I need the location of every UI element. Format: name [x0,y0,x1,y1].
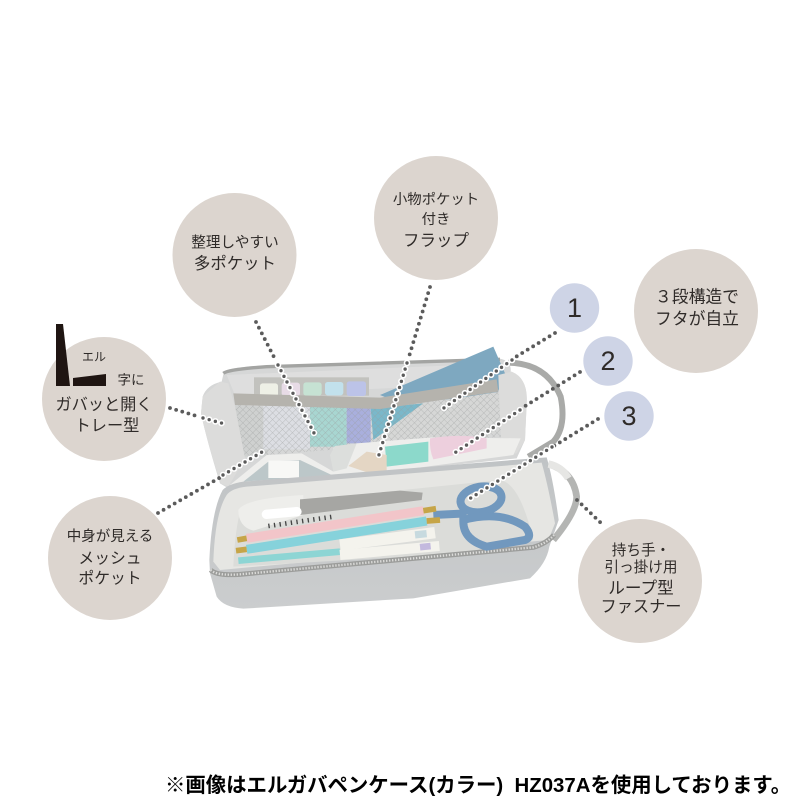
zipper teeth [211,535,554,575]
footnote: ※画像はエルガバペンケース(カラー) HZ037Aを使用しております。 [165,774,791,797]
callout circle: see-through mesh pocket [48,496,172,620]
colours behind the mesh [235,392,500,457]
callout circle: flap with small pocket: 付き [422,211,450,228]
number badge 2 [583,336,633,386]
callout circle: see-through mesh pocket: メッシュ [78,550,142,568]
flap inner shadow [243,460,332,482]
callout dots: mesh pocket [158,452,262,513]
callout circle: three tiers: フタが自立 [655,310,739,328]
tray interior [213,463,555,570]
callout circle: see-through mesh pocket: 中身が見える [67,528,153,545]
tray shell [209,457,559,609]
number badge 2: 2 [600,346,616,376]
callout circle: flap with small pocket: フラップ [403,231,470,250]
lid zipper [223,359,500,373]
callout circle: easy to organise pockets: 整理しやすい [191,234,279,251]
mesh pocket [235,392,502,457]
tray floor [233,480,533,567]
highlighter one [340,530,435,545]
number badge 1: 1 [567,293,582,323]
scissors [433,483,529,547]
highlighter two [238,543,439,561]
L shape caption: エル [82,350,106,364]
callout circle: easy to organise pockets: 多ポケット [194,255,276,273]
side gusset right [498,372,527,455]
shape suffix: 字に [118,372,144,388]
pink pen [237,509,436,540]
pocket band [233,379,498,409]
callout circle: see-through mesh pocket: ポケット [78,570,142,588]
callout circle: L-shape tray [42,324,166,461]
lid shell [201,358,527,488]
icon: L shape [56,324,106,386]
callout dots: L-shape tray [170,408,225,424]
callout dots: number 1 [441,333,555,410]
upper loop handle [508,363,563,457]
callout circle: loop zipper: ファスナー [601,598,681,616]
callout circle: loop zipper: ループ型 [608,578,674,598]
sticky note backing [254,377,369,396]
blue pen [236,520,440,551]
tray wording [55,396,153,435]
tray wording: トレー型 [75,417,139,435]
tiny pocket silver [330,443,357,472]
callout circle: loop zipper: 持ち手・ [612,542,670,559]
lower loop handle [548,464,577,540]
flap tab [268,461,299,478]
washi tape teal [385,442,428,467]
callout dots: multi pockets [256,322,314,433]
callout circle: three tiers [634,249,758,373]
utility cutter [238,491,423,531]
callout circle: flap with small pocket: 小物ポケット [393,191,479,208]
callout dots: number 2 [453,372,580,454]
pencase photo illustration [201,347,577,609]
zipper [211,535,554,575]
callout dots: loop zipper [577,500,603,525]
lid lining [227,363,500,395]
callout circle: loop zipper: 引っ掛け用 [605,559,677,576]
callout circle: three tiers: ３段構造で [655,288,739,306]
side gusset left [201,382,245,487]
callout circle: loop zipper [578,519,702,643]
sticky notes [260,381,366,397]
washi tape pink [430,436,487,459]
tray wording: ガバッと開く [55,396,153,414]
callout dots: flap [378,287,430,458]
callout circle: flap with small pocket [374,156,498,280]
callout circle: easy to organise pockets [172,193,296,317]
number badge 1 [550,283,599,333]
tape dispenser [348,452,387,473]
flap pocket [230,437,521,490]
callout dots: number 3 [466,419,598,501]
number badge 3 [604,391,654,441]
ruler [380,347,505,403]
number badge 3: 3 [621,401,637,431]
